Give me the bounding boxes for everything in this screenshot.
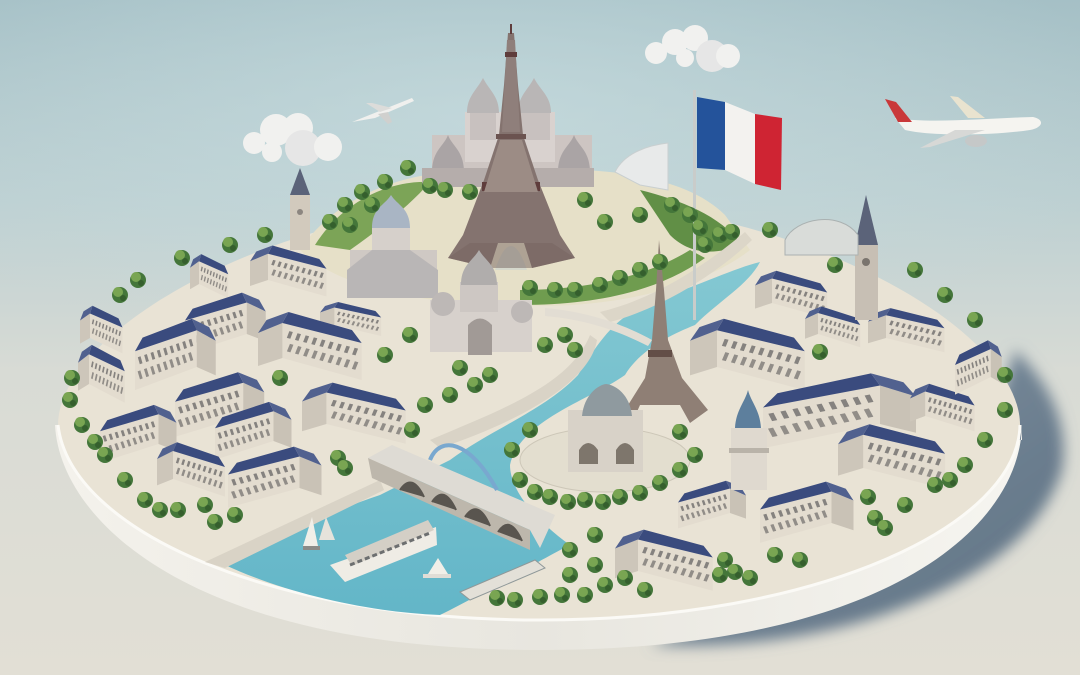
buildings: right district (615, 271, 1002, 591)
platform shadow (650, 350, 1063, 646)
river (205, 232, 760, 615)
tower right (855, 195, 878, 320)
big Eiffel Tower (448, 24, 575, 270)
trees: hill (322, 160, 740, 298)
triumphal arch (568, 384, 643, 472)
trees: left rim (62, 227, 273, 530)
small arched bridge (545, 308, 652, 346)
cloud left (243, 113, 342, 166)
domed tower (729, 390, 769, 490)
trees: roundabout (504, 422, 703, 510)
Sacre-Coeur basilica (422, 78, 594, 187)
trees: bottom (489, 527, 808, 608)
large plane (885, 96, 1041, 148)
buildings: left district (78, 246, 406, 508)
barge (460, 560, 545, 600)
trees: centre left (272, 327, 583, 476)
small plane (352, 98, 414, 124)
roundabout plaza (520, 428, 690, 492)
domed building left (347, 195, 438, 298)
hill (300, 169, 750, 306)
cloud right (645, 25, 740, 72)
clock tower left (290, 168, 310, 250)
sailboat 2 (423, 558, 451, 578)
sailboat 1 (303, 517, 335, 550)
large bridge (368, 445, 555, 550)
river cruise boat (330, 520, 437, 582)
trees: right rim (762, 222, 1013, 536)
white arched structure behind hill (615, 143, 668, 190)
iron arch right (785, 220, 858, 255)
flag pole and French flag (693, 90, 782, 320)
round platform (55, 200, 1022, 650)
small Eiffel Tower (625, 240, 708, 423)
basilica centre (430, 250, 533, 355)
